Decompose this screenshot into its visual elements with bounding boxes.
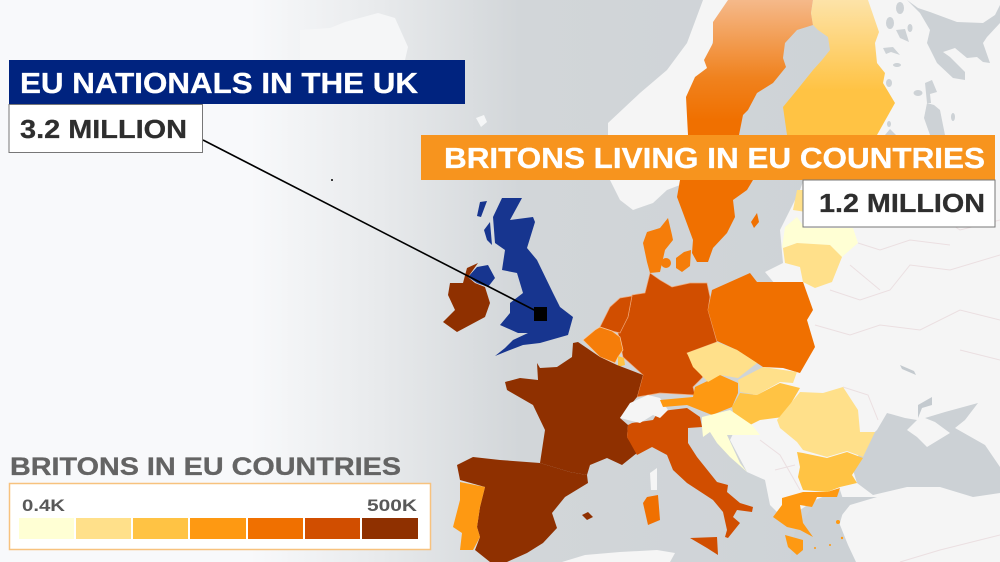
country: Luxembourg <box>618 356 625 367</box>
marker: London <box>534 307 547 321</box>
country: Germany <box>618 273 717 397</box>
country: Belgium <box>583 327 623 363</box>
country: Switzerland <box>620 395 668 423</box>
heading: Britons living in EU countries <box>421 135 995 180</box>
value: 1.2 million: 1.2 MILLION <box>819 188 985 218</box>
value: 3.2 million <box>9 104 202 152</box>
country: Poland <box>708 273 815 373</box>
country: Spain <box>457 457 588 562</box>
country: Austria <box>660 375 738 415</box>
country: Romania <box>777 387 875 457</box>
country: Slovakia <box>738 367 797 395</box>
country: Netherlands <box>600 296 632 333</box>
country: Greece <box>773 488 843 555</box>
sea: Black Sea <box>853 403 1000 497</box>
country: Estonia <box>793 190 806 212</box>
legend label: maximum: 500K <box>367 496 418 515</box>
country: Bulgaria <box>797 452 863 492</box>
country: Finland <box>783 0 895 135</box>
legend colour scale <box>19 518 418 539</box>
map of Europe <box>300 0 1000 562</box>
country: Portugal <box>453 482 485 550</box>
land: Iceland <box>300 13 408 60</box>
country: Hungary <box>732 383 800 425</box>
country: United Kingdom <box>468 198 573 356</box>
sea: White Sea <box>907 0 1000 80</box>
island: Sardinia <box>643 495 660 525</box>
country: Sweden <box>677 0 813 262</box>
heading: EU nationals in the UK: EU NATIONALS IN THE UK <box>20 68 418 100</box>
island: Corsica <box>650 468 657 490</box>
country: Ireland <box>443 263 490 332</box>
lakes: Finland and Karelia <box>883 2 955 135</box>
land: Norway <box>608 0 730 210</box>
legend label: minimum: 0.4K <box>22 496 66 515</box>
value: 1.2 million <box>803 180 995 227</box>
country: Czech Republic <box>687 342 757 382</box>
country: France <box>505 342 643 475</box>
land: Faroe Islands <box>476 115 487 127</box>
stray map dot <box>331 179 333 181</box>
borders: Eastern Europe <box>760 210 1000 562</box>
heading: EU nationals in the UK <box>9 60 465 104</box>
island: Sicily <box>690 537 718 555</box>
island: Balearics <box>582 512 593 520</box>
lakes: Ukraine <box>900 365 932 418</box>
country: Latvia <box>782 217 858 257</box>
legend panel <box>10 484 430 550</box>
country: Denmark <box>643 218 691 273</box>
country: Slovenia and Croatia <box>702 410 760 472</box>
country: Italy <box>627 408 753 538</box>
heading: Britons living in EU countries: BRITONS LIVING IN EU COUNTRIES <box>444 143 985 175</box>
connector line to London <box>203 140 540 313</box>
land: Eastern Europe and Turkey <box>730 0 1000 562</box>
country: Lithuania <box>783 243 842 288</box>
land: North Africa <box>562 550 675 562</box>
island: Gotland <box>751 213 759 228</box>
legend title: BRITONS IN EU COUNTRIES <box>10 453 401 481</box>
sea: Aegean <box>790 497 877 562</box>
value: 3.2 million: 3.2 MILLION <box>20 114 187 144</box>
